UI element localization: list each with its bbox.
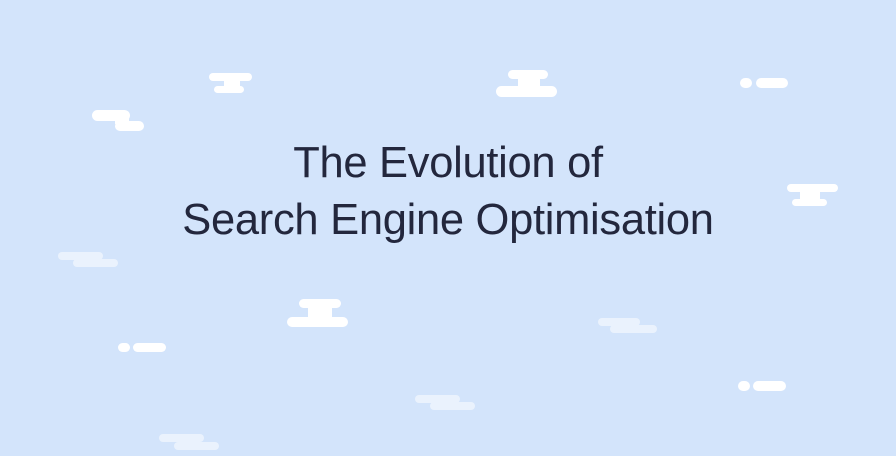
title: The Evolution of: [293, 139, 603, 187]
cloud 10: [738, 381, 786, 391]
cloud 12: [159, 434, 219, 450]
cloud 6: [58, 252, 118, 267]
cloud 3: [496, 70, 557, 97]
cloud 11: [415, 395, 475, 410]
cloud 7: [287, 299, 348, 327]
title: Search Engine Optimisation: [182, 196, 714, 244]
cloud 1: [209, 73, 252, 93]
title: [182, 139, 714, 244]
cloud 4: [740, 78, 788, 88]
cloud 8: [598, 318, 657, 333]
cloud 5: [787, 184, 838, 206]
cloud 2: [92, 110, 144, 131]
cloud 9: [118, 343, 166, 352]
